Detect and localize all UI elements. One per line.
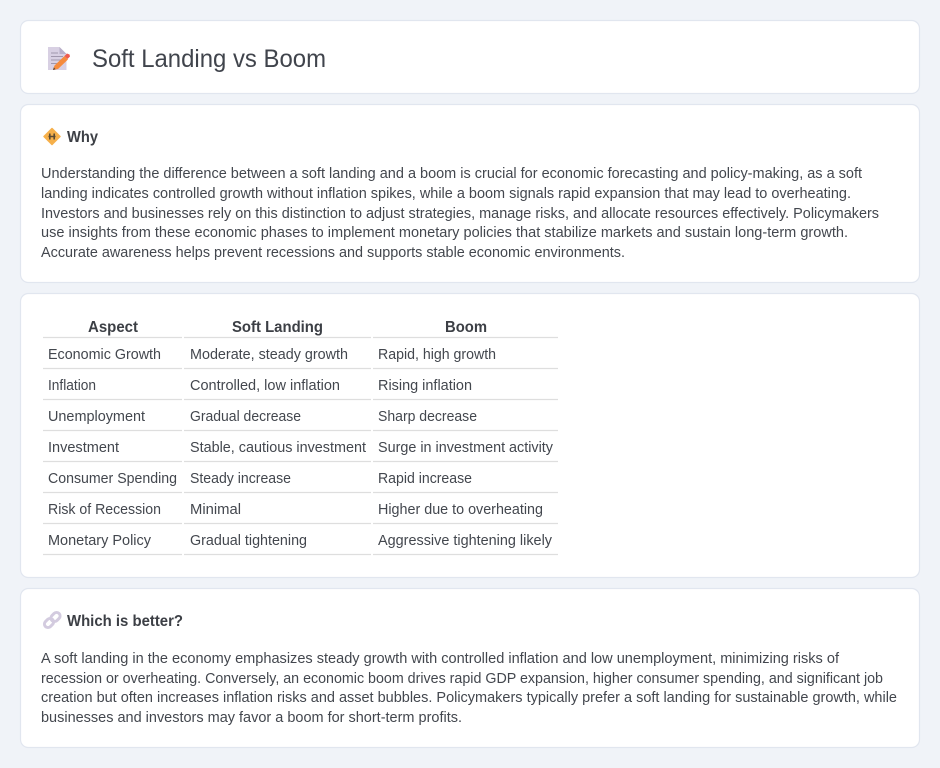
text block: which is better paragraph: A soft landing in the economy emphasizes steady growth with controlled inflation and low unemployment, minimizing risks of xyxy=(41,651,840,667)
text block: why paragraph: landing indicates controlled growth without inflation spikes, while a boom signals rapid expansion that may lead to overheating. xyxy=(41,186,851,202)
table header xyxy=(88,319,487,336)
panel: why xyxy=(20,104,920,282)
row: consumer spending: Steady increase xyxy=(190,471,291,487)
row: consumer spending: Consumer Spending xyxy=(48,471,177,487)
row: investment xyxy=(48,440,554,456)
row: monetary policy: Gradual tightening xyxy=(190,533,307,549)
text block: why paragraph: Understanding the difference between a soft landing and a boom is crucial for economic forecasting and policy-making, as a soft xyxy=(41,166,862,182)
row: investment: Surge in investment activity xyxy=(378,440,554,456)
title: Soft Landing vs Boom xyxy=(92,45,326,73)
panel: which is better xyxy=(20,588,920,748)
text block: which is better paragraph xyxy=(41,651,897,726)
row: risk of recession: Minimal xyxy=(190,502,241,518)
row: unemployment xyxy=(48,409,477,425)
text block: why paragraph: use insights from these economic phases to implement monetary policies that stabilize markets and sustain long-term growth. xyxy=(41,225,848,241)
row: inflation: Rising inflation xyxy=(378,378,472,394)
row: investment: Stable, cautious investment xyxy=(190,440,366,456)
row: monetary policy: Aggressive tightening likely xyxy=(378,533,553,549)
row: economic growth xyxy=(48,347,496,363)
row: consumer spending: Rapid increase xyxy=(378,471,472,487)
table header: Aspect xyxy=(88,319,139,336)
row: monetary policy xyxy=(48,533,553,549)
row: risk of recession: Higher due to overheating xyxy=(378,502,543,518)
table header: Boom xyxy=(445,319,487,336)
text block: which is better paragraph: creation but often increases inflation risks and asset bubbles. Policymakers typically prefer a soft landing for sustainable growth, while xyxy=(41,690,897,706)
text block: which is better paragraph: businesses and investors may favor a boom for short-term profits. xyxy=(41,710,462,726)
text block: why paragraph xyxy=(41,166,879,261)
row: investment: Investment xyxy=(48,440,119,456)
row: economic growth: Economic Growth xyxy=(48,347,161,363)
text block: which is better paragraph: recession or overheating. Conversely, an economic boom drives rapid GDP expansion, higher consumer spending, and significant job xyxy=(41,671,883,687)
row: unemployment: Sharp decrease xyxy=(378,409,477,425)
icon: memo with pencil xyxy=(48,47,70,70)
row: risk of recession xyxy=(48,502,543,518)
table header: Soft Landing xyxy=(232,319,323,336)
row: unemployment: Gradual decrease xyxy=(190,409,301,425)
row: inflation: Inflation xyxy=(48,378,96,394)
heading: which is better: Which is better? xyxy=(67,613,183,630)
panel: title header xyxy=(20,20,920,94)
panel: comparison table xyxy=(20,294,920,578)
icon: link xyxy=(43,611,62,629)
row: economic growth: Moderate, steady growth xyxy=(190,347,348,363)
row: inflation xyxy=(48,378,472,394)
row: monetary policy: Monetary Policy xyxy=(48,533,152,549)
row: risk of recession: Risk of Recession xyxy=(48,502,161,518)
row: inflation: Controlled, low inflation xyxy=(190,378,340,394)
icon: diamond sign xyxy=(44,128,60,144)
row: economic growth: Rapid, high growth xyxy=(378,347,496,363)
text block: why paragraph: Investors and businesses rely on this distinction to adjust strategies, manage risks, and allocate resources effectively. Policymakers xyxy=(41,206,879,222)
row: unemployment: Unemployment xyxy=(48,409,145,425)
text block: why paragraph: Accurate awareness helps prevent recessions and supports stable economic environments. xyxy=(41,245,625,261)
row: consumer spending xyxy=(48,471,472,487)
heading: why: Why xyxy=(67,129,98,146)
